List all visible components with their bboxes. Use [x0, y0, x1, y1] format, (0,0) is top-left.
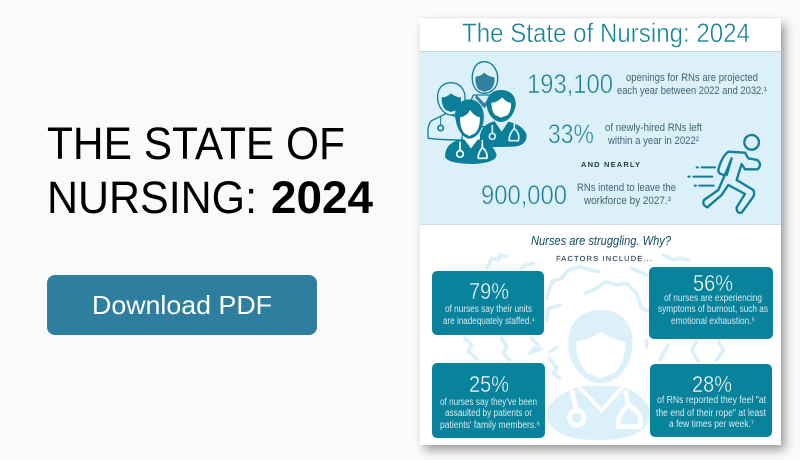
panel: 25% assaulted: of nurses say they've been	[440, 397, 537, 408]
panel: infographic card	[420, 17, 785, 450]
heading: The State of Nursing 2024	[47, 118, 373, 223]
panel: 25% assaulted: 25%	[469, 371, 509, 397]
stat: 33% left within a year: of newly-hired RNs left	[605, 122, 702, 134]
panel: 25% assaulted: patients' family members.⁶	[440, 420, 540, 431]
panel: 28% end of their rope: a few times per week.⁷	[669, 419, 754, 430]
panel: 79% units inadequately staffed: are inadequately staffed.⁴	[443, 316, 535, 327]
panel: 56% burnout: symptoms of burnout, such as	[658, 304, 768, 315]
stat: 900,000 intend to leave: RNs intend to leave the	[577, 182, 676, 194]
heading: The State of Nursing 2024: 2024	[271, 172, 373, 223]
label: factors include: FACTORS INCLUDE...	[556, 254, 652, 263]
stat: 900,000 intend to leave: workforce by 2027.³	[583, 195, 671, 207]
heading: The State of Nursing 2024: NURSING:	[47, 172, 257, 223]
stat: 900,000 intend to leave	[481, 180, 676, 210]
stat: 900,000 intend to leave: 900,000	[481, 180, 567, 210]
panel: 28% end of their rope: 28%	[692, 371, 732, 397]
panel: 56% burnout: 56%	[693, 270, 733, 296]
button: Download PDF	[47, 275, 317, 335]
panel: 56% burnout: of nurses are experiencing	[664, 293, 762, 304]
panel: 79% units inadequately staffed: of nurses say their units	[445, 304, 532, 315]
panel: 28% end of their rope: of RNs reported they feel "at	[657, 395, 766, 406]
stat: 33% left within a year	[548, 119, 702, 149]
panel: 56% burnout	[649, 267, 773, 339]
stat: 33% left within a year: within a year in 2022²	[607, 135, 699, 147]
stat: 193,100 openings: each year between 2022 and 2032.¹	[617, 85, 767, 97]
subheading: Nurses are struggling: Nurses are struggling. Why?	[531, 233, 672, 248]
panel: 28% end of their rope	[650, 364, 772, 437]
icon: running figure	[688, 135, 760, 213]
illustration: stressed doctor with squiggles	[465, 255, 723, 440]
stat: 193,100 openings: openings for RNs are projected	[626, 72, 758, 84]
heading: The State of Nursing 2024: THE STATE OF	[47, 118, 345, 169]
card title: The State of Nursing: 2024	[462, 18, 750, 48]
panel: workforce statistics	[420, 51, 781, 225]
panel: 79% units inadequately staffed: 79%	[469, 278, 509, 304]
stat: 193,100 openings: 193,100	[527, 69, 613, 99]
stat: 33% left within a year: 33%	[548, 119, 594, 149]
panel: 28% end of their rope: the end of their rope" at least	[656, 408, 766, 419]
panel: 79% units inadequately staffed	[432, 271, 544, 335]
label: and nearly: AND NEARLY	[581, 160, 640, 169]
icon: group of nurses and doctors	[428, 62, 527, 164]
panel: 25% assaulted: assaulted by patients or	[445, 408, 533, 419]
panel: 25% assaulted	[432, 363, 545, 438]
panel: 56% burnout: emotional exhaustion.⁵	[671, 316, 755, 327]
stat: 193,100 openings	[527, 69, 767, 99]
button: Download PDF: Download PDF	[92, 290, 272, 320]
